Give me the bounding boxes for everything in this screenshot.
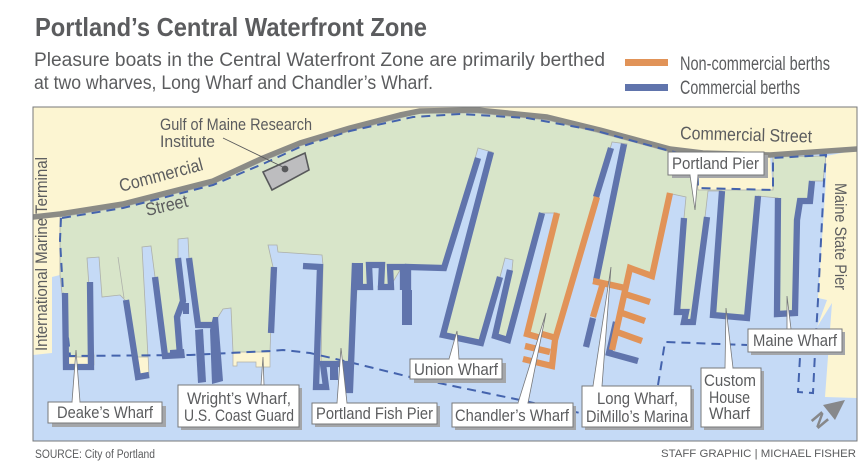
intro text: at two wharves, Long Wharf and Chandler’s Wharf. bbox=[34, 73, 433, 94]
callout: Union Wharf: Union Wharf bbox=[414, 360, 498, 379]
callout: Portland Fish Pier: Portland Fish Pier bbox=[316, 404, 433, 423]
callout: Wright's Wharf: Wright’s Wharf, bbox=[187, 389, 291, 408]
callout: Portland Pier bbox=[668, 152, 768, 210]
icon: research institute building bbox=[223, 138, 309, 190]
icon: north arrow: N bbox=[806, 408, 832, 433]
callout: Custom House Wharf: Custom bbox=[704, 371, 756, 390]
callout: Long Wharf, DiMillo's Marina: DiMillo’s Marina bbox=[586, 407, 688, 426]
land: north of Commercial Street and terminals bbox=[33, 107, 857, 355]
label: Gulf of Maine Research Institute bbox=[160, 115, 312, 151]
street labels: Street bbox=[143, 191, 190, 220]
callout: Wright's Wharf bbox=[178, 357, 302, 430]
callout: Custom House Wharf: Wharf bbox=[709, 404, 750, 423]
callout: Union Wharf bbox=[410, 331, 506, 383]
label: Maine State Pier: Maine State Pier bbox=[831, 183, 850, 290]
map bbox=[33, 107, 857, 441]
street labels: Commercial bbox=[117, 154, 205, 196]
zone boundary bbox=[60, 114, 826, 413]
intro text bbox=[34, 50, 605, 94]
callout: Long Wharf, DiMillo's Marina bbox=[582, 267, 694, 430]
callout: Deake's Wharf: Deake’s Wharf bbox=[57, 403, 153, 422]
title: Portland’s Central Waterfront Zone bbox=[35, 12, 427, 42]
commercial berths bbox=[65, 144, 812, 390]
callout: Long Wharf, DiMillo's Marina: Long Wharf, bbox=[597, 389, 678, 408]
callout: Wright's Wharf: U.S. Coast Guard bbox=[184, 406, 294, 425]
credit: STAFF GRAPHIC | MICHAEL FISHER bbox=[661, 448, 856, 460]
Commercial Street bbox=[33, 110, 857, 217]
callout: Custom House Wharf: House bbox=[709, 388, 750, 407]
callout: Custom House Wharf bbox=[701, 308, 764, 430]
water bbox=[33, 107, 857, 441]
label: International Marine Terminal: International Marine Terminal bbox=[32, 157, 51, 351]
callout: Chandler's Wharf bbox=[452, 313, 576, 430]
source: SOURCE: City of Portland bbox=[35, 449, 155, 461]
callout: Deake's Wharf bbox=[48, 350, 166, 427]
frame bbox=[33, 107, 857, 441]
legend bbox=[625, 54, 830, 99]
callout: Maine Wharf: Maine Wharf bbox=[753, 331, 837, 350]
icon: north arrow bbox=[806, 400, 845, 433]
beige wharf patches bbox=[68, 350, 336, 378]
callout: Chandler's Wharf: Chandler’s Wharf bbox=[455, 406, 569, 425]
callout: Maine Wharf bbox=[748, 296, 845, 355]
non-commercial berths bbox=[523, 193, 670, 366]
intro text: Pleasure boats in the Central Waterfront Zone are primarily berthed bbox=[34, 50, 605, 71]
callout: Portland Pier: Portland Pier bbox=[672, 154, 759, 173]
label: Gulf of Maine Research Institute: Gulf of Maine Research bbox=[160, 115, 312, 134]
legend: Commercial berths bbox=[680, 78, 800, 99]
callout: Portland Fish Pier bbox=[312, 348, 440, 427]
street labels: Commercial Street bbox=[680, 123, 812, 146]
label: Gulf of Maine Research Institute: Institute bbox=[160, 132, 215, 151]
green zone bbox=[60, 113, 826, 362]
street labels bbox=[117, 123, 812, 220]
Maine State Pier bbox=[817, 150, 857, 398]
